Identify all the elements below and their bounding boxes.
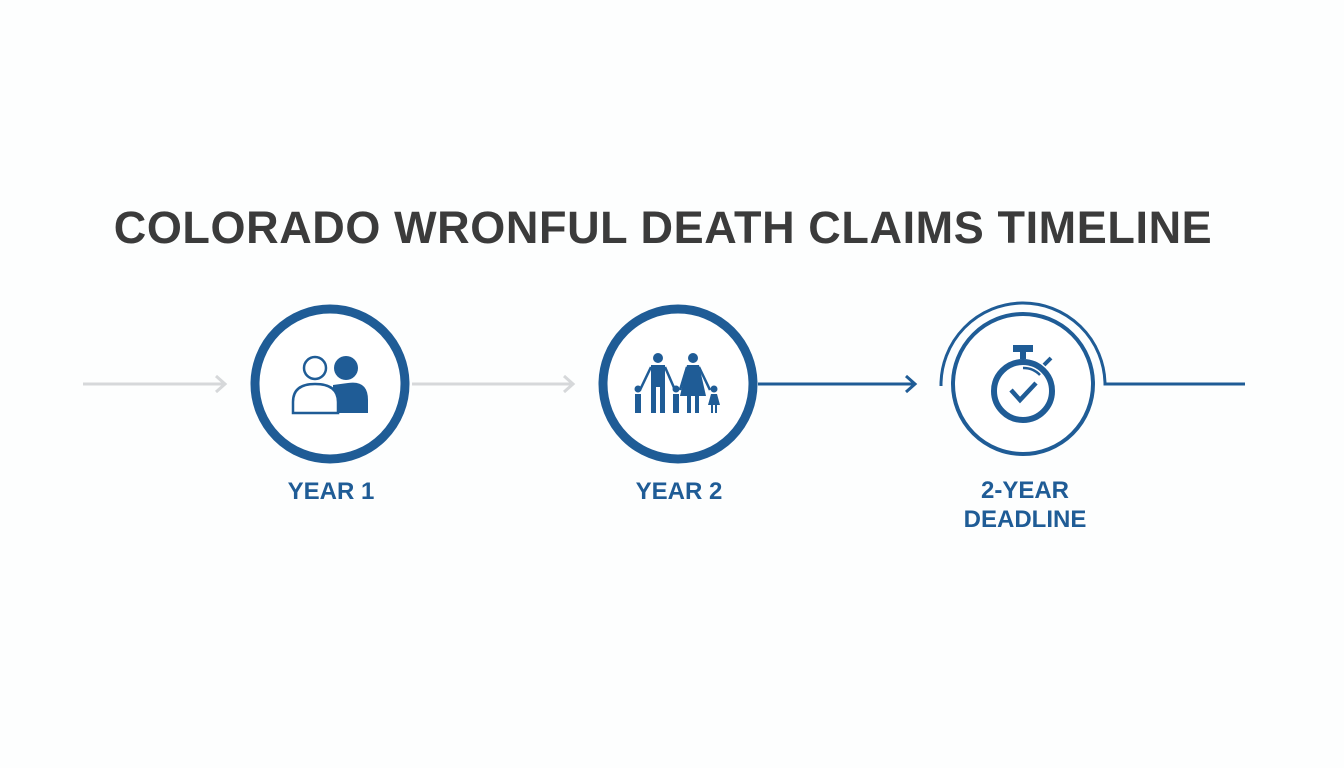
label: year 1: YEAR 1: [288, 478, 374, 505]
circle: year 1: [255, 309, 405, 459]
line: after deadline: [941, 303, 1245, 386]
title: COLORADO WRONFUL DEATH CLAIMS TIMELINE: [114, 202, 1212, 253]
arrow: year2 to deadline: [758, 376, 915, 392]
label: deadline: DEADLINE: [964, 506, 1086, 533]
icon: two people: [293, 356, 368, 413]
icon: stopwatch: [994, 345, 1052, 420]
arrow: start: [83, 376, 225, 392]
circle: year 2: [603, 309, 753, 459]
arrow: year1 to year2: [412, 376, 573, 392]
circle: deadline: [953, 314, 1093, 454]
icon: family: [634, 353, 720, 413]
label: deadline: [964, 477, 1086, 533]
label: year 2: YEAR 2: [636, 478, 722, 505]
label: deadline: 2-YEAR: [981, 477, 1069, 504]
